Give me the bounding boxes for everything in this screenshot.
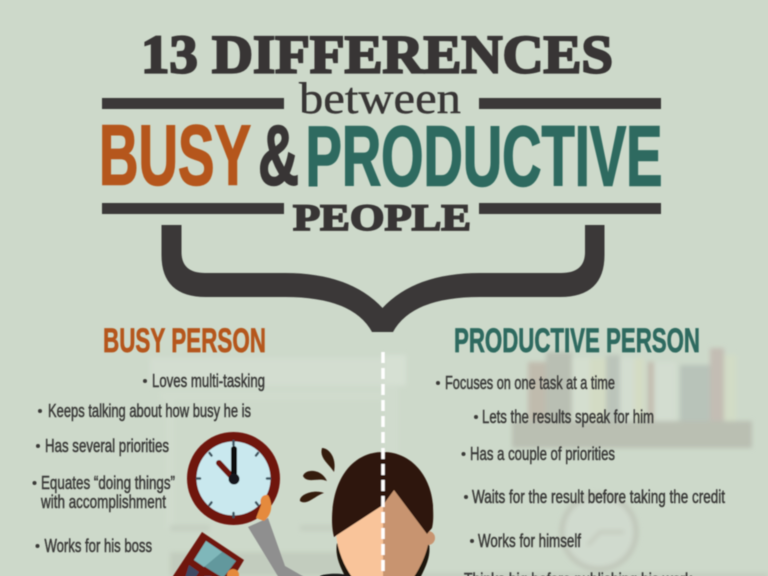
productive person list: Works for himself <box>478 530 582 551</box>
column heading: busy person: BUSY PERSON <box>103 322 266 360</box>
title: 13 differences: 13 DIFFERENCES <box>141 24 613 84</box>
productive person list: Focuses on one task at a time <box>445 372 615 393</box>
dashed centre divider <box>381 352 385 576</box>
busy person list: Equates “doing things” <box>41 472 175 493</box>
busy person list: Loves multi-tasking <box>152 370 265 391</box>
subtitle: between with rules: between <box>299 74 461 123</box>
productive person list: Has a couple of priorities <box>470 443 615 464</box>
subtitle: people with rules: PEOPLE <box>293 198 471 239</box>
icon: calculator <box>170 532 244 576</box>
heading: ampersand: & <box>258 108 299 204</box>
icon: wall clock <box>187 432 280 525</box>
icon: arm <box>248 518 306 576</box>
icon: hand <box>256 495 271 521</box>
busy person list: Works for his boss <box>44 535 152 556</box>
subtitle: between with rules <box>102 74 661 123</box>
busy person list: Has several priorities <box>45 435 169 456</box>
blurred office backdrop <box>150 348 768 576</box>
subtitle: people with rules <box>102 198 661 239</box>
icon: sweat drops <box>300 448 335 502</box>
busy person list <box>32 370 265 556</box>
productive person list <box>436 372 725 576</box>
busy person list: with accomplishment <box>40 491 166 512</box>
heading: busy: BUSY <box>99 108 251 204</box>
icon: head <box>320 452 435 576</box>
busy person list: Keeps talking about how busy he is <box>48 400 251 421</box>
curly brace <box>162 225 604 332</box>
productive person list: Lets the results speak for him <box>482 406 654 427</box>
